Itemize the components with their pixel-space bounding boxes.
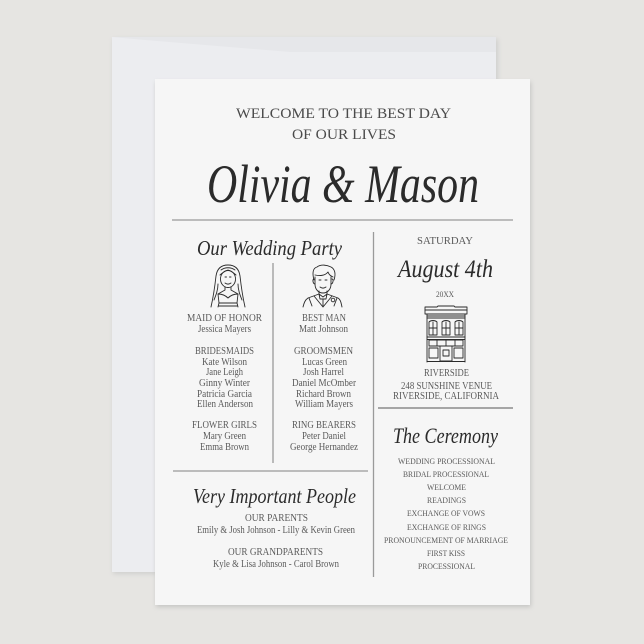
ceremony schedule: EXCHANGE OF RINGS xyxy=(407,523,486,532)
heading: very important people: Very Important People xyxy=(193,484,356,508)
divider lines xyxy=(172,220,513,577)
left column names xyxy=(187,313,262,453)
title: welcome: OF OUR LIVES xyxy=(292,127,396,143)
icon: venue building xyxy=(425,306,467,362)
heading: the ceremony: The Ceremony xyxy=(393,423,498,448)
ring bearers: Peter Daniel xyxy=(302,431,346,442)
venue address xyxy=(393,368,500,402)
ceremony schedule xyxy=(384,457,508,571)
bridesmaids: Patricia Garcia xyxy=(197,389,253,400)
icon: bride xyxy=(211,265,245,307)
ceremony schedule: READINGS xyxy=(427,496,466,505)
best man xyxy=(299,313,348,335)
ring bearers: RING BEARERS xyxy=(292,420,356,431)
bridesmaids xyxy=(195,346,254,410)
bridesmaids: Jane Leigh xyxy=(206,367,243,378)
venue address: RIVERSIDE xyxy=(424,368,469,379)
ceremony schedule: WEDDING PROCESSIONAL xyxy=(398,457,495,466)
groomsmen: Lucas Green xyxy=(302,357,347,368)
groomsmen: Josh Harrel xyxy=(303,367,344,378)
bridesmaids: Ellen Anderson xyxy=(197,399,253,410)
groomsmen xyxy=(292,346,357,410)
title: welcome xyxy=(236,106,451,143)
best man: BEST MAN xyxy=(302,313,346,324)
ceremony schedule: PROCESSIONAL xyxy=(418,562,475,571)
date: august 4th: August 4th xyxy=(396,256,493,283)
important people names xyxy=(197,513,355,570)
bridesmaids: BRIDESMAIDS xyxy=(195,346,254,357)
date: year: 20XX xyxy=(436,290,454,299)
middle column names xyxy=(290,313,359,453)
ceremony schedule: BRIDAL PROCESSIONAL xyxy=(403,470,489,479)
important people names: Kyle & Lisa Johnson - Carol Brown xyxy=(213,559,339,570)
flower girls: FLOWER GIRLS xyxy=(192,420,257,431)
ceremony schedule: EXCHANGE OF VOWS xyxy=(407,509,485,518)
maid of honor xyxy=(187,313,262,335)
important people names: Emily & Josh Johnson - Lilly & Kevin Green xyxy=(197,525,355,536)
ring bearers: George Hernandez xyxy=(290,442,359,453)
important people names: OUR PARENTS xyxy=(245,513,308,524)
wedding card xyxy=(155,79,531,607)
bridesmaids: Kate Wilson xyxy=(202,357,247,368)
important people names: OUR GRANDPARENTS xyxy=(228,547,323,558)
best man: Matt Johnson xyxy=(299,324,348,335)
groomsmen: William Mayers xyxy=(295,399,353,410)
ceremony schedule: FIRST KISS xyxy=(427,549,465,558)
maid of honor: Jessica Mayers xyxy=(198,324,251,335)
flower girls: Mary Green xyxy=(203,431,246,442)
bridesmaids: Ginny Winter xyxy=(199,378,251,389)
groomsmen: Richard Brown xyxy=(296,389,351,400)
venue address: RIVERSIDE, CALIFORNIA xyxy=(393,391,500,402)
icon: groom xyxy=(303,265,342,307)
envelope xyxy=(112,37,498,574)
ceremony schedule: WELCOME xyxy=(427,483,466,492)
ring bearers xyxy=(290,420,359,453)
date: saturday: SATURDAY xyxy=(417,235,473,247)
heading: our wedding party: Our Wedding Party xyxy=(197,236,343,260)
maid of honor: MAID OF HONOR xyxy=(187,313,262,324)
groomsmen: Daniel McOmber xyxy=(292,378,357,389)
flower girls: Emma Brown xyxy=(200,442,249,453)
title: welcome: WELCOME TO THE BEST DAY xyxy=(236,106,451,122)
title: couple names: Olivia & Mason xyxy=(207,154,479,214)
ceremony schedule: PRONOUNCEMENT OF MARRIAGE xyxy=(384,536,508,545)
groomsmen: GROOMSMEN xyxy=(294,346,353,357)
flower girls xyxy=(192,420,257,453)
venue address: 248 SUNSHINE VENUE xyxy=(401,381,492,392)
